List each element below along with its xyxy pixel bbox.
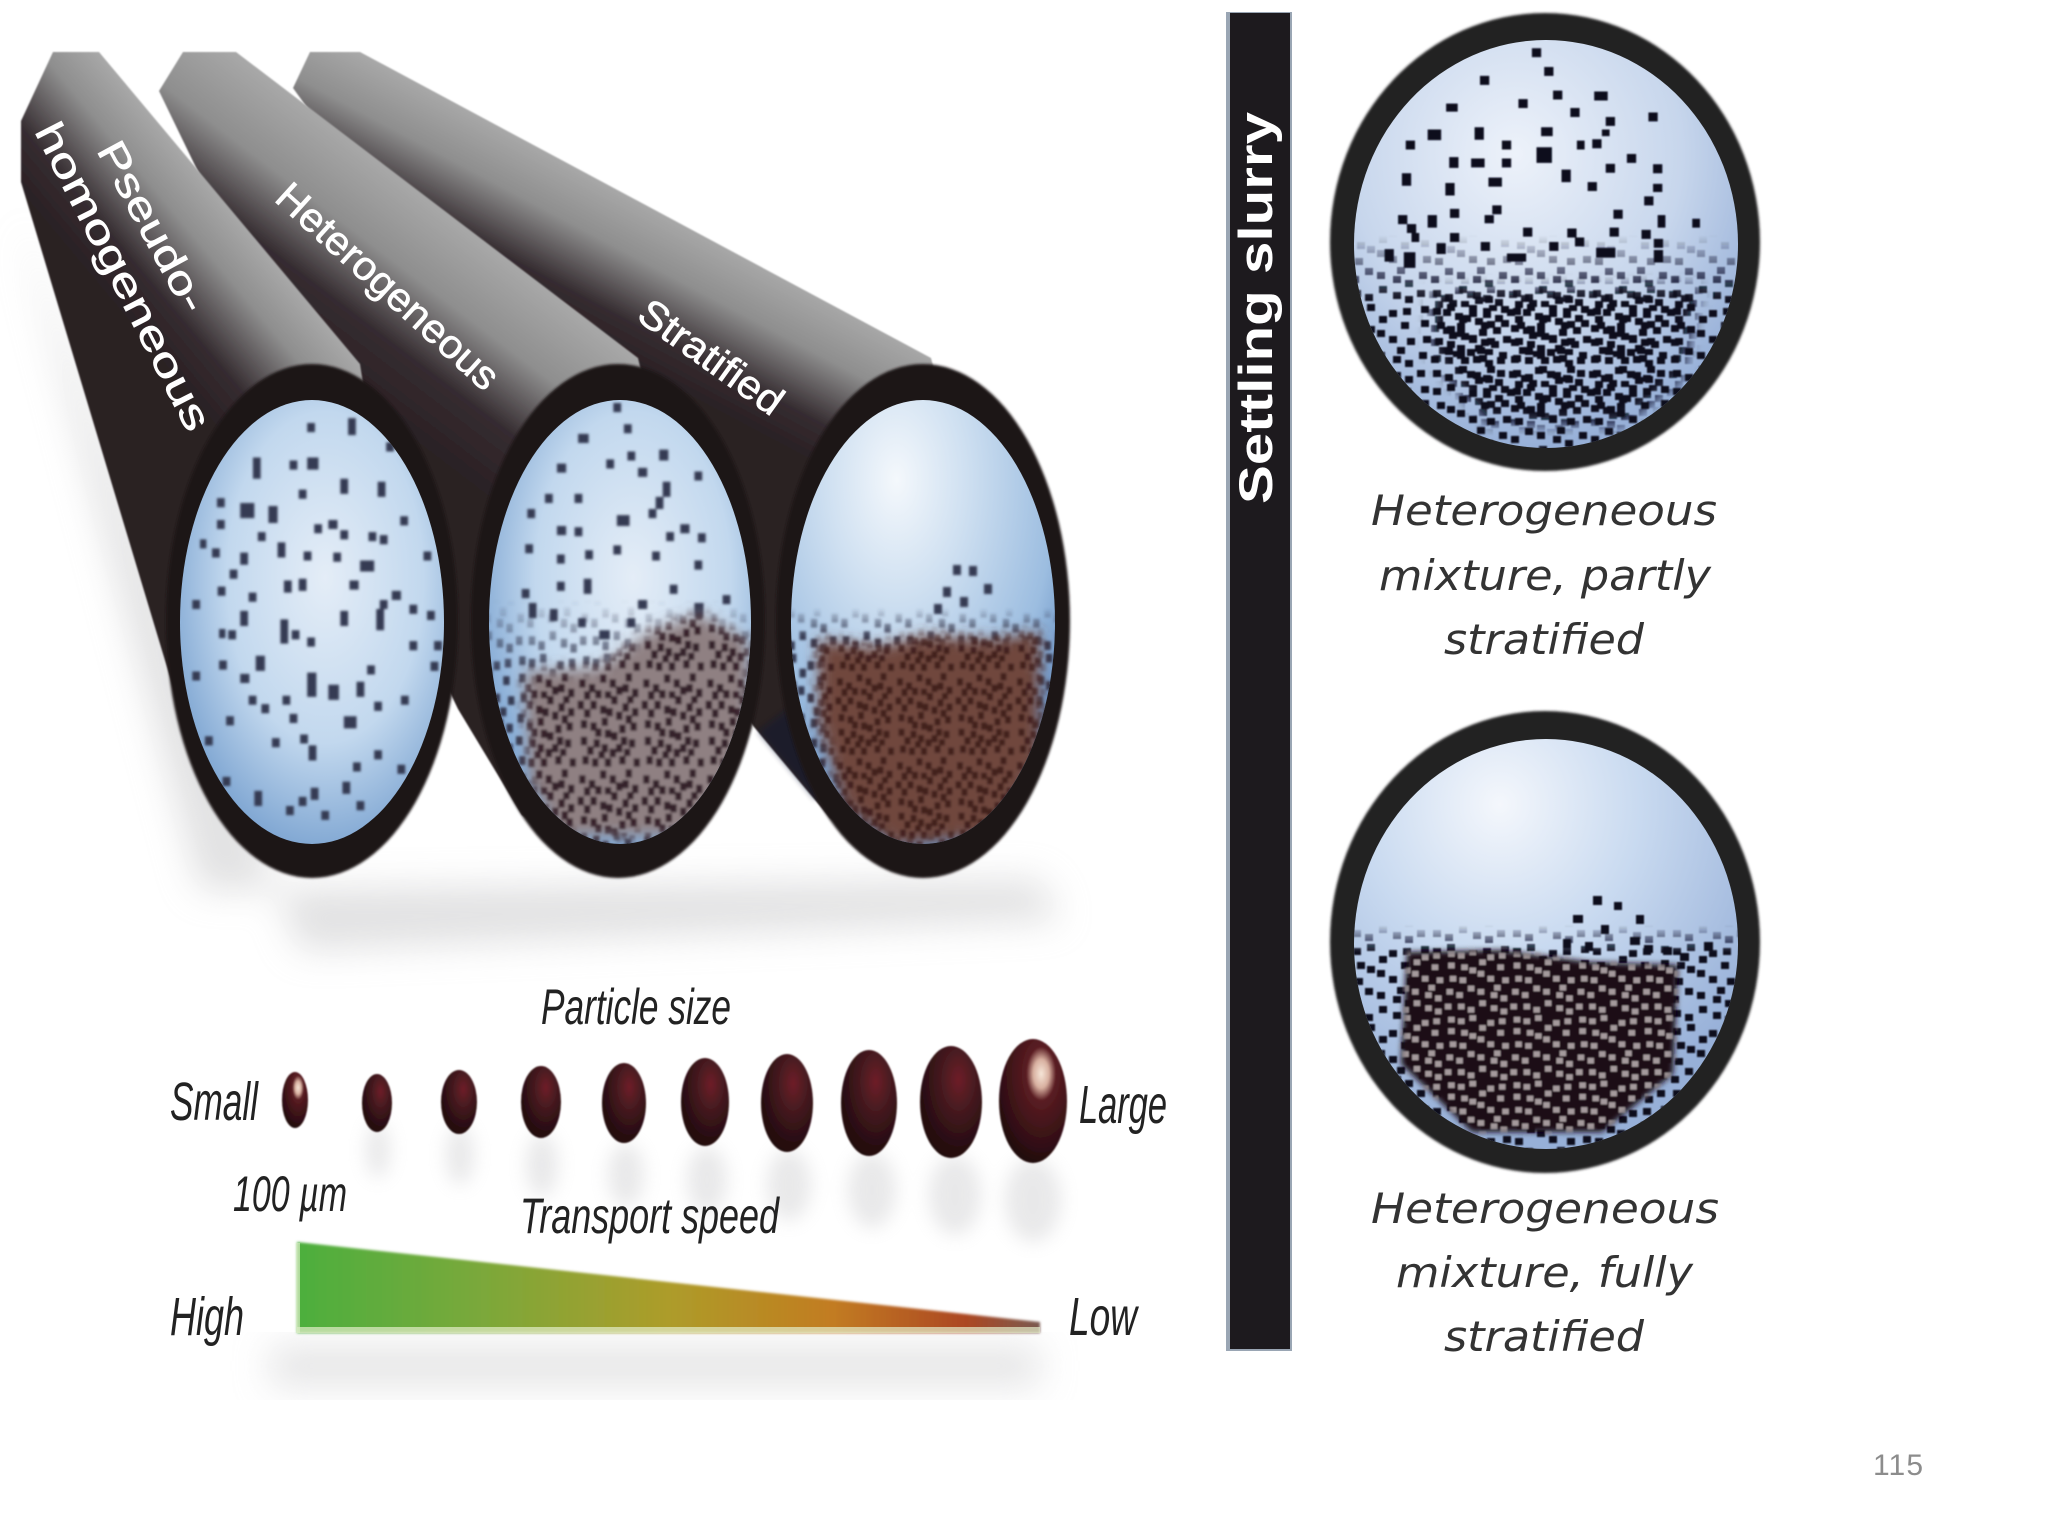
pipe label: Stratified: Stratified	[630, 291, 792, 424]
particle size spheres	[282, 1039, 1067, 1163]
caption: fully stratified: Heterogeneous	[1371, 1184, 1719, 1233]
label: small: Small	[170, 1072, 259, 1132]
pipe: pseudo-homogeneous body	[21, 52, 400, 868]
circle: particles	[1345, 48, 1745, 455]
panel: particle size scale	[170, 979, 1167, 1242]
pipe label: Pseudo-: Pseudo-	[88, 133, 216, 320]
panel: partly stratified cross-section	[1330, 13, 1760, 664]
heterogeneous particles	[480, 403, 760, 855]
caption: fully stratified: stratified	[1444, 1312, 1644, 1361]
stratified particles	[784, 565, 1064, 855]
page number: 115	[1873, 1449, 1923, 1482]
label: 100 µm: 100 µm	[233, 1166, 347, 1222]
vertical band: settling slurry	[1226, 12, 1292, 1351]
panel: three pipe flow regimes	[20, 52, 1070, 950]
pipe cast shadow	[20, 220, 1060, 950]
pipe: stratified body	[293, 52, 1000, 870]
sphere shadows	[366, 1122, 1061, 1242]
label: large: Large	[1079, 1075, 1167, 1135]
pipe: heterogeneous opening	[471, 364, 765, 878]
wedge shadow	[270, 1345, 1040, 1387]
caption: partly stratified: stratified	[1444, 615, 1644, 664]
pipe: pseudo-homogeneous opening	[166, 364, 458, 878]
pipe label: Heterogeneous: Heterogeneous	[267, 174, 508, 399]
pseudo-homogeneous particles	[192, 418, 442, 820]
pipe label: homogeneous: homogeneous	[26, 115, 220, 438]
caption: fully stratified: mixture, fully	[1396, 1248, 1694, 1297]
pipe: shaded underside	[758, 700, 830, 800]
panel: transport speed scale	[170, 1166, 1139, 1387]
caption: partly stratified: mixture, partly	[1379, 551, 1712, 600]
label: high: High	[170, 1287, 244, 1347]
speed wedge	[296, 1242, 1040, 1333]
circle: pipe rim	[1330, 13, 1760, 471]
circle: fluid	[1354, 739, 1738, 1149]
pipe: stratified opening	[776, 364, 1070, 878]
heading: particle size: Particle size	[541, 979, 731, 1035]
caption: partly stratified: Heterogeneous	[1371, 486, 1717, 535]
caption: fully stratified	[1371, 1184, 1719, 1361]
circle: particles	[1345, 896, 1745, 1155]
label: low: Low	[1069, 1287, 1139, 1347]
circle: pipe rim	[1330, 711, 1760, 1173]
circle: fluid	[1354, 40, 1738, 448]
pipe: heterogeneous body	[159, 52, 700, 870]
caption: partly stratified	[1371, 486, 1717, 664]
band label: Settling slurry	[1229, 112, 1282, 504]
panel: fully stratified cross-section	[1330, 711, 1760, 1361]
heading: transport speed: Transport speed	[520, 1188, 781, 1244]
